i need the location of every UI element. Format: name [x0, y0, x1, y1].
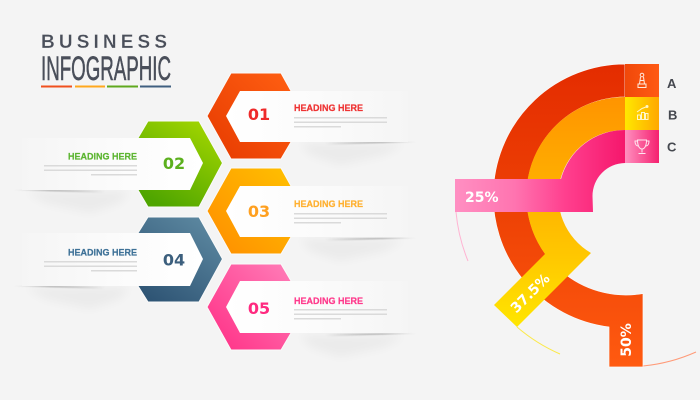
- hexagon: [207, 264, 291, 350]
- band: 25% pink: [455, 130, 625, 212]
- heading: HEADING HERE: [294, 199, 363, 210]
- radial percentage chart: [455, 64, 696, 367]
- step 01: [207, 73, 416, 165]
- heading: HEADING HERE: [294, 103, 363, 114]
- paper panel: [226, 281, 408, 333]
- label: 25%: 25%: [465, 190, 499, 206]
- hexagon: [207, 168, 291, 254]
- label: 37.5%: 37.5%: [508, 271, 554, 317]
- thin guide arc: orange: [643, 352, 696, 366]
- text lines: [294, 117, 387, 128]
- paper panel: [22, 233, 203, 286]
- icon: trophy: [635, 140, 649, 154]
- step 02: [14, 121, 222, 213]
- step 03: [207, 168, 416, 261]
- text lines: [294, 213, 387, 224]
- heading: HEADING HERE: [68, 152, 137, 162]
- number: 02: [163, 154, 185, 173]
- legend cell B: [625, 97, 659, 130]
- paper shadow: [300, 142, 416, 165]
- paper panel: [226, 186, 408, 237]
- paper shadow: [14, 286, 130, 309]
- legend letter A: A: [667, 76, 677, 91]
- legend letter C: C: [667, 140, 677, 154]
- title line: BUSINESS: BUSINESS: [41, 32, 167, 53]
- number: 05: [248, 299, 270, 318]
- step 04: [14, 217, 222, 309]
- number: 04: [163, 250, 185, 270]
- legend: [625, 64, 677, 163]
- thin guide arc: pink: [456, 212, 468, 261]
- text lines: [294, 309, 387, 320]
- legend cell A: [625, 64, 659, 97]
- number: 01: [248, 105, 270, 124]
- title line: INFOGRAPHIC: INFOGRAPHIC: [41, 50, 171, 88]
- legend cell C: [625, 130, 659, 163]
- hexagon: [207, 73, 291, 159]
- label: 50%: 50%: [619, 323, 635, 357]
- hexagon: [138, 217, 222, 302]
- paper shadow: [14, 190, 130, 213]
- step 05: [207, 264, 416, 357]
- paper shadow: [300, 334, 416, 357]
- text lines: [44, 165, 137, 176]
- heading: HEADING HERE: [294, 296, 363, 307]
- paper panel: [22, 138, 203, 190]
- paper shadow: [300, 238, 416, 261]
- band: 37.5% orange yellow: [494, 97, 625, 327]
- icon: tower: [638, 73, 646, 88]
- hexagon: [138, 121, 222, 207]
- text lines: [44, 261, 137, 272]
- icon: growth chart: [637, 106, 648, 120]
- band: 50% red: [493, 64, 643, 367]
- heading: HEADING HERE: [68, 248, 137, 258]
- legend letter B: B: [668, 108, 677, 122]
- title: [41, 32, 171, 88]
- title underline colors: [41, 86, 171, 88]
- number: 03: [248, 202, 270, 221]
- paper panel: [226, 91, 408, 142]
- thin guide arc: yellow: [517, 327, 560, 354]
